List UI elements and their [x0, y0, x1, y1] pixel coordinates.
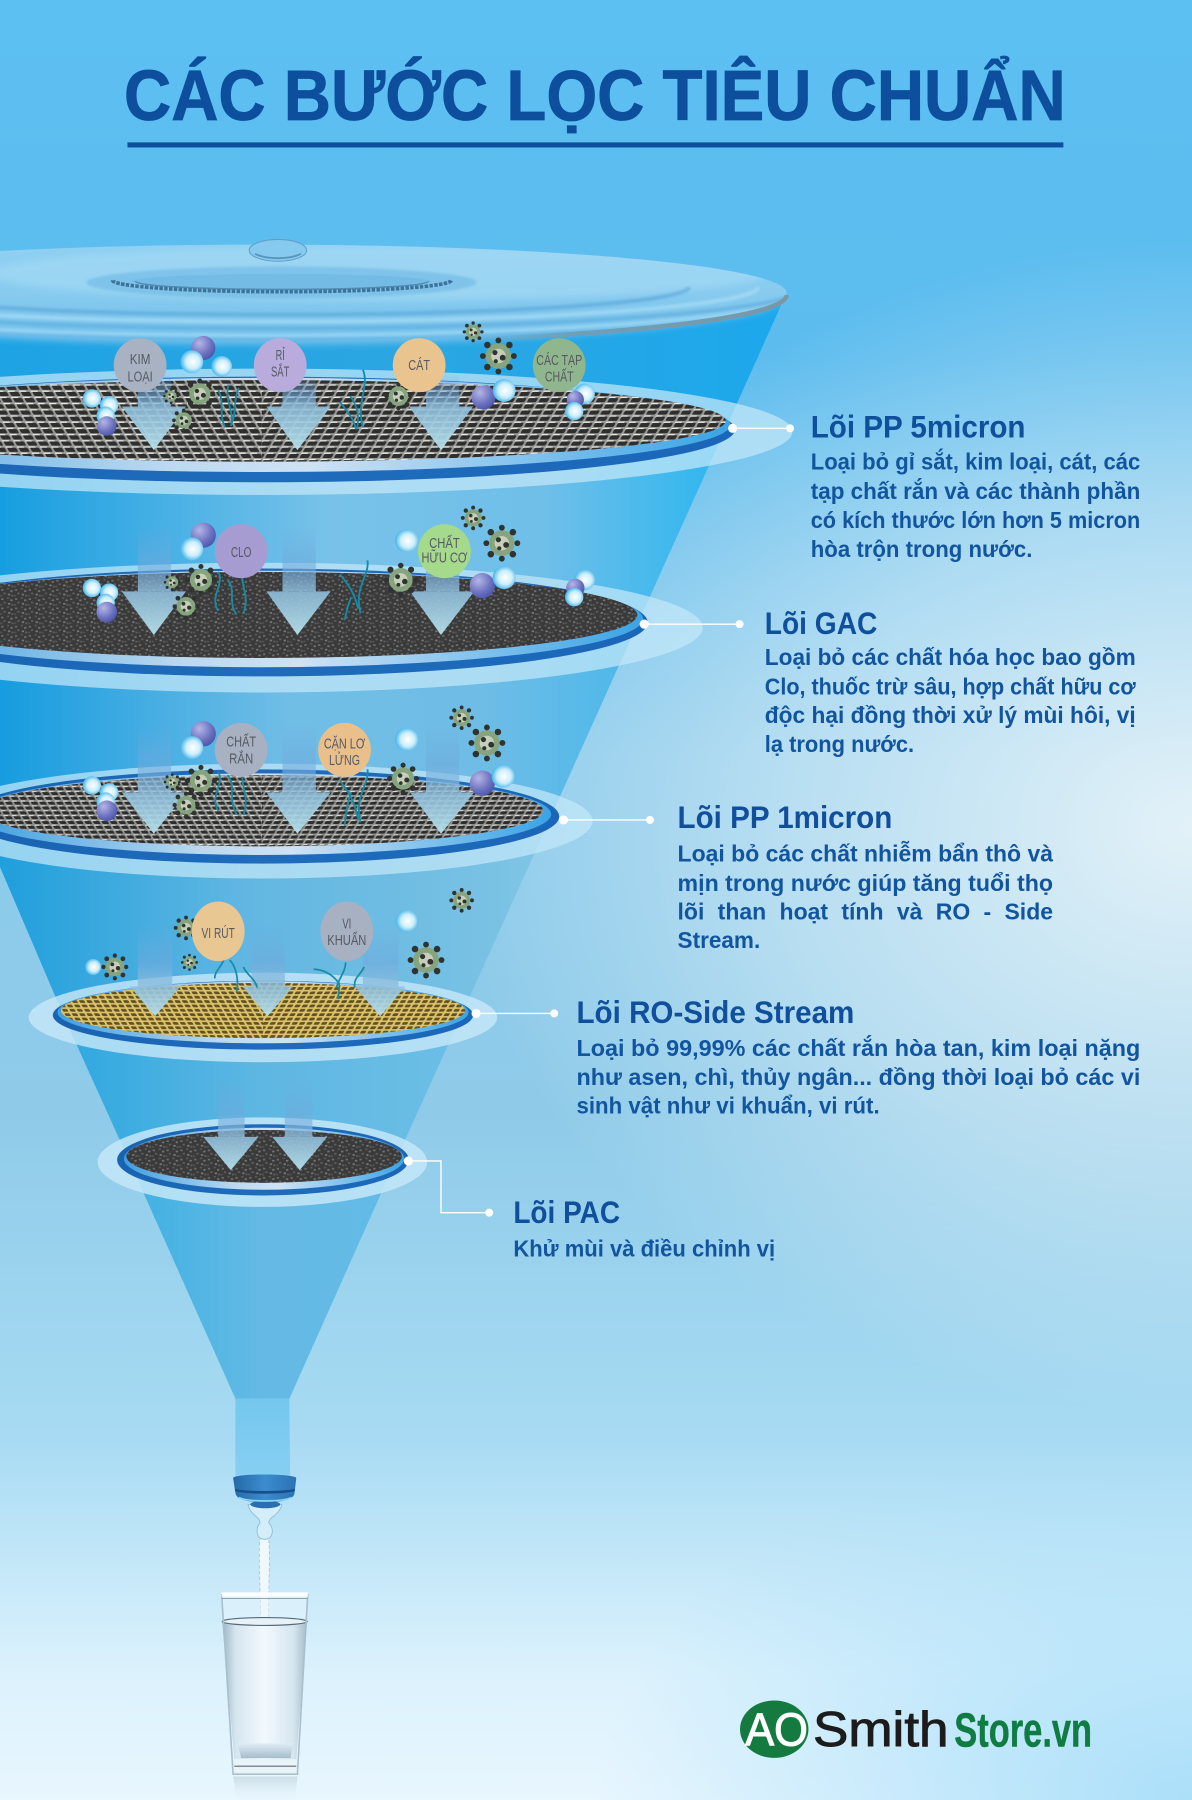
title underline: [127, 142, 1063, 147]
logo: AOSmith Store.vn: AO: [745, 1704, 808, 1756]
faucet cap and water stream: [233, 1474, 296, 1625]
filter funnel cone: [0, 293, 787, 1476]
text block: GAC: Loại bỏ các chất hóa học bao gồm: [765, 644, 1136, 670]
contaminants on disc 1: [83, 321, 595, 436]
text block: PP 1 micron: Stream.: [678, 927, 760, 953]
text block: GAC: [765, 605, 1136, 757]
label bubbles disc 2: HỮU CƠ: [421, 550, 468, 567]
text block: PP 1 micron: lõi than hoạt tính và RO - Side: [678, 898, 1053, 924]
contaminants on disc 3: [83, 705, 514, 825]
label bubbles disc 3: [215, 723, 371, 777]
logo: AOSmith Store.vn: Store.vn: [954, 1704, 1092, 1758]
text block: RO Side Stream: Loại bỏ 99,99% các chất rắn hòa tan, kim loại nặng: [576, 1035, 1140, 1061]
label bubbles disc 1: SẮT: [271, 363, 289, 381]
logo: AOSmith Store.vn: [740, 1700, 1092, 1758]
label bubbles disc 3: CẶN LƠ: [324, 736, 365, 753]
text block: PP 5 micron: [811, 409, 1141, 562]
label bubbles disc 1: CHẤT: [545, 368, 574, 385]
label bubbles disc 2: CHẤT: [429, 535, 460, 552]
text block: PP 1 micron: mịn trong nước giúp tăng tuổi thọ: [678, 870, 1053, 896]
contaminants on disc 2: [83, 506, 595, 622]
text block: PP 5 micron: có kích thước lớn hơn 5 micron: [811, 507, 1140, 533]
text block: PAC: Lõi PAC: [513, 1194, 620, 1230]
text block: PP 1 micron: Lõi PP 1micron: [678, 799, 892, 835]
glass of water: [222, 1594, 308, 1799]
filter disc 4: RO Side Stream: [29, 924, 497, 1062]
label bubbles disc 1: RỈ: [276, 347, 285, 364]
text block: PP 1 micron: Loại bỏ các chất nhiễm bẩn thô và: [678, 840, 1053, 866]
text block: GAC: Clo, thuốc trừ sâu, hợp chất hữu cơ: [765, 673, 1136, 699]
text block: PP 1 micron: [678, 799, 1053, 953]
water surface with ripples and drop: [0, 239, 850, 345]
label bubbles disc 2: [215, 524, 471, 578]
label bubbles disc 4: KHUẨN: [327, 931, 366, 949]
text block: RO Side Stream: sinh vật như vi khuẩn, vi rút.: [576, 1092, 880, 1118]
label bubbles disc 1: CÁT: [408, 357, 430, 374]
label bubbles disc 4: VI: [342, 916, 351, 933]
label bubbles disc 4: VI RÚT: [202, 925, 235, 942]
text block: PP 5 micron: Loại bỏ gỉ sắt, kim loại, cát, các: [811, 449, 1141, 475]
text block: PP 5 micron: hòa trộn trong nước.: [811, 536, 1032, 562]
label bubbles disc 2: CLO: [231, 544, 251, 561]
text block: PP 5 micron: tạp chất rắn và các thành phần: [811, 478, 1140, 504]
text block: PAC: Khử mùi và điều chỉnh vị: [513, 1235, 775, 1261]
contaminants on disc 4: [85, 888, 474, 999]
text block: GAC: lạ trong nước.: [765, 731, 914, 757]
text block: PAC: [513, 1194, 775, 1261]
filter disc 1: PP 5 micron: [0, 369, 792, 495]
label bubbles disc 1: KIM: [130, 351, 150, 368]
text block: PP 5 micron: Lõi PP 5micron: [811, 409, 1025, 445]
filter disc 3: PP 1 micron: [0, 723, 593, 878]
text block: RO Side Stream: Lõi RO-Side Stream: [576, 994, 854, 1030]
connector lines: [404, 424, 794, 1217]
label bubbles disc 1: LOẠI: [127, 368, 153, 385]
label bubbles disc 3: CHẤT: [226, 733, 256, 750]
title: CÁC BƯỚC LỌC TIÊU CHUẨN: [124, 56, 1066, 136]
text block: RO Side Stream: [576, 994, 1140, 1118]
text block: RO Side Stream: như asen, chì, thủy ngân... đồng thời loại bỏ các vi: [576, 1064, 1140, 1090]
text block: GAC: Lõi GAC: [765, 605, 877, 641]
label bubbles disc 1: [114, 338, 586, 392]
text block: GAC: độc hại đồng thời xử lý mùi hôi, vị: [765, 702, 1136, 728]
logo: AOSmith Store.vn: Smith: [813, 1702, 949, 1757]
filter disc 5: PAC: [98, 1079, 427, 1207]
filter disc 2: GAC: [0, 525, 703, 692]
label bubbles disc 3: LỬNG: [329, 751, 360, 769]
label bubbles disc 3: RẮN: [229, 750, 253, 768]
label bubbles disc 1: CÁC TẠP: [536, 352, 582, 369]
label bubbles disc 4: [192, 901, 373, 961]
